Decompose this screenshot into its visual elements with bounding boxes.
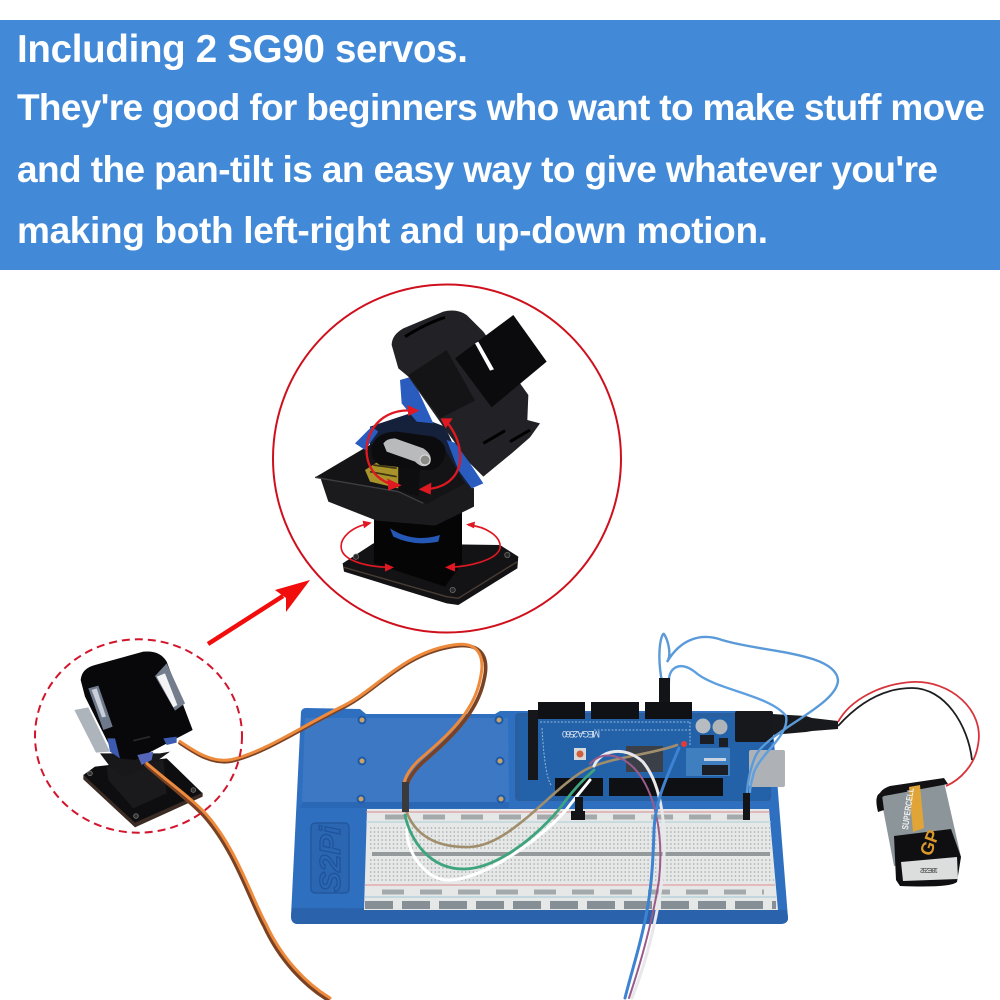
arrow: red pointer to close-up xyxy=(208,580,310,644)
base plate xyxy=(83,758,203,827)
ribbon wires to bottom xyxy=(594,751,664,998)
mounting standoffs xyxy=(358,716,504,802)
blue base plate xyxy=(291,708,788,924)
SUPERCELL brand: SUPERCELL xyxy=(900,787,916,830)
white slit xyxy=(475,342,494,371)
lower bracket xyxy=(100,752,170,777)
silkscreen traces xyxy=(540,722,690,786)
black jumper connectors xyxy=(571,678,750,820)
cylinder xyxy=(374,510,462,587)
power LED xyxy=(681,741,687,747)
tilted triangular plate xyxy=(315,436,465,504)
blue servo accents xyxy=(355,377,483,488)
heading: included servos: Including 2 SG90 servos. xyxy=(17,28,468,71)
Arduino Mega shield xyxy=(515,702,785,801)
small pan-tilt photo xyxy=(74,651,203,827)
yellow servo label xyxy=(365,458,398,488)
text line: pan-tilt: and the pan-tilt is an easy way to give whatever you're xyxy=(17,149,938,190)
blue wire loop two xyxy=(669,666,786,792)
tan wire xyxy=(405,745,677,847)
DC barrel jack xyxy=(735,711,773,742)
bracket upright xyxy=(398,462,420,497)
blue wire to bottom xyxy=(625,748,679,998)
left window xyxy=(88,686,113,730)
cylinder xyxy=(107,760,167,808)
folded flap upper xyxy=(455,315,547,407)
text line: motion: making both left-right and up-down motion. xyxy=(17,210,768,251)
small chips and pads xyxy=(686,735,730,776)
GP logo: GP xyxy=(916,827,944,858)
text line: beginners: They're good for beginners who want to make stuff move xyxy=(17,87,985,128)
left pin header xyxy=(528,710,538,780)
servo cable to breadboard xyxy=(180,644,486,786)
breadboard jumper wires xyxy=(405,634,838,998)
battery top cap xyxy=(878,778,948,800)
close-up circle outline xyxy=(273,284,621,632)
top pin headers xyxy=(538,702,585,719)
blue wire loop one xyxy=(659,634,838,792)
folded flap lower xyxy=(408,350,475,418)
dashed circle around small pan-tilt xyxy=(35,639,242,833)
right window xyxy=(155,663,185,711)
capacitors xyxy=(696,718,728,734)
microcontroller chip xyxy=(626,746,663,772)
red tilt rotation arrows xyxy=(367,410,460,489)
controller recess xyxy=(302,718,509,802)
green wire xyxy=(405,770,594,869)
yellow stripe xyxy=(909,785,924,832)
power plug cable xyxy=(772,714,838,735)
reset button xyxy=(574,748,586,760)
base plate xyxy=(343,543,518,605)
battery black lower body xyxy=(894,829,961,886)
servo horn xyxy=(371,432,446,470)
bottom pin headers xyxy=(555,778,603,796)
close-up pan-tilt bracket xyxy=(315,311,547,605)
plate slot xyxy=(133,737,150,741)
solderless breadboard xyxy=(364,809,778,910)
breadboard base plate assembly xyxy=(291,702,788,924)
white wire xyxy=(407,780,590,880)
front plate xyxy=(81,651,193,760)
silver side plate xyxy=(74,707,110,753)
9V battery xyxy=(876,778,961,886)
board silkscreen label: MEGA 2560 xyxy=(562,729,600,739)
dark servo mass behind horn xyxy=(370,413,473,488)
orange connector on breadboard xyxy=(402,782,409,812)
USB port xyxy=(749,750,785,787)
second servo cable xyxy=(146,764,330,1000)
blue servo accents xyxy=(107,738,120,758)
tilting plate xyxy=(392,311,540,477)
S2Pi logo: S2Pi xyxy=(315,825,347,892)
lower body xyxy=(320,477,474,526)
red pan rotation arrows xyxy=(341,523,500,567)
panel: blue header banner xyxy=(0,20,1000,270)
white battery label: 18-E292 xyxy=(920,866,938,873)
battery lead wires xyxy=(838,682,979,786)
